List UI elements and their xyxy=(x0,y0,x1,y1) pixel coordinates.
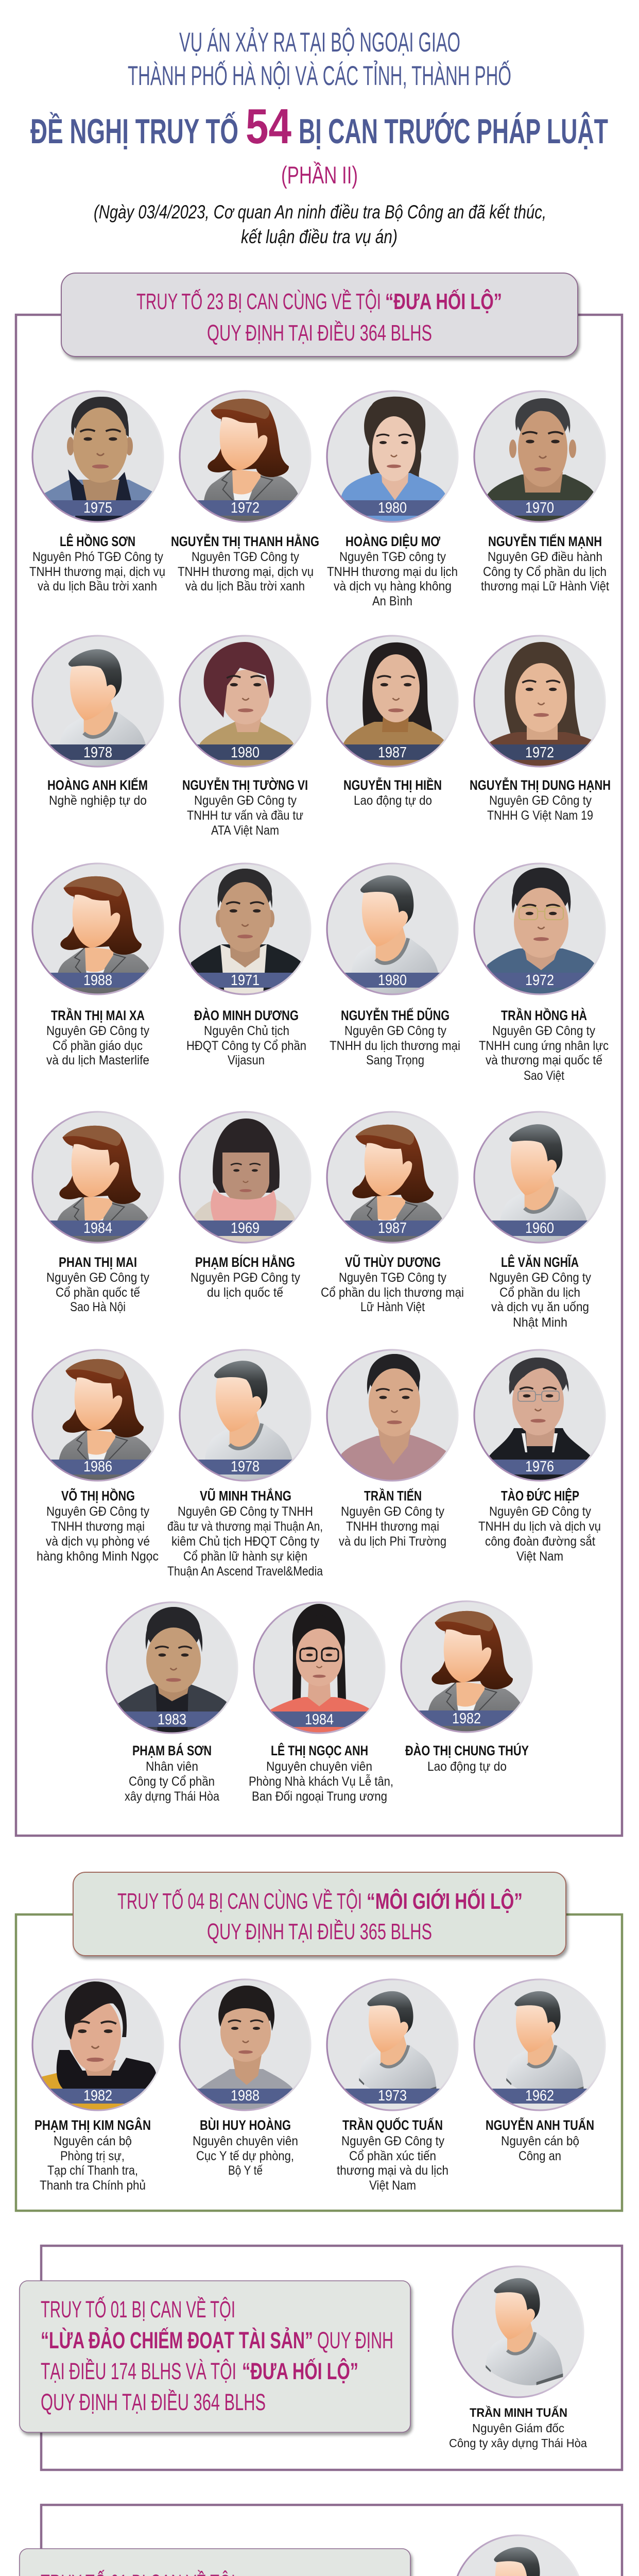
charge box xyxy=(20,2549,410,2576)
name and role: Nguyên cán bộ xyxy=(54,2134,132,2148)
portrait: 1988 xyxy=(231,2088,260,2104)
portrait: 1969 xyxy=(231,1220,260,1236)
name and role: Cổ phần du lịch thương mại xyxy=(321,1285,464,1300)
name and role xyxy=(321,1255,464,1314)
portrait: 1960 xyxy=(525,1220,554,1236)
name and role: Vijasun xyxy=(228,1053,265,1067)
name and role: An Bình xyxy=(372,594,412,608)
name and role: và dịch vụ phòng vé xyxy=(46,1534,150,1549)
portrait xyxy=(327,1350,458,1481)
portrait: 1972 xyxy=(525,972,554,989)
name and role: Nguyên GĐ Công ty xyxy=(344,1024,446,1038)
portrait: 1987 xyxy=(378,744,407,761)
name and role: TRẦN HỒNG HÀ xyxy=(501,1008,587,1023)
name and role xyxy=(191,1255,300,1300)
name and role: Cổ phần xúc tiến xyxy=(349,2149,436,2163)
name and role: Thuận An Ascend Travel&Media xyxy=(167,1564,323,1579)
name and role xyxy=(479,1008,609,1083)
name and role: Cổ phần giáo dục xyxy=(53,1039,143,1053)
name and role: và du lịch Bầu trời xanh xyxy=(38,579,157,594)
name and role: Nguyên GĐ Công ty xyxy=(492,1024,595,1038)
name and role: VÕ THỊ HỒNG xyxy=(61,1488,135,1503)
name and role xyxy=(470,777,611,823)
name and role: Nguyên TGĐ Công ty xyxy=(339,1270,446,1285)
name and role: TRẦN THỊ MAI XA xyxy=(51,1008,145,1023)
name and role: Cổ phần lữ hành sự kiện xyxy=(183,1549,307,1564)
person: Hoàng Diệu Mơ xyxy=(326,391,458,608)
heading: đưa hối lộ: TRUY TỐ 23 BỊ CAN CÙNG VỀ TỘI xyxy=(136,288,381,314)
heading: môi giới hối lộ: QUY ĐỊNH TẠI ĐIỀU 365 BLHS xyxy=(207,1919,432,1944)
portrait xyxy=(179,636,311,767)
name and role: Cục Y tế dự phòng, xyxy=(196,2149,294,2163)
name and role: TRẦN QUỐC TUẤN xyxy=(342,2117,443,2133)
portrait xyxy=(32,391,164,522)
name and role: Nguyên GĐ Công ty xyxy=(489,793,592,808)
charge box xyxy=(20,2281,410,2432)
portrait xyxy=(106,1602,238,1734)
portrait xyxy=(179,1112,311,1243)
portrait xyxy=(32,1979,164,2111)
name and role: kiêm Chủ tịch HĐQT Công ty xyxy=(171,1534,319,1549)
name and role xyxy=(46,1008,149,1067)
portrait xyxy=(326,1979,458,2110)
name and role: Nguyên GĐ Công ty xyxy=(489,1504,591,1519)
person: Đào Thị Chung Thúy xyxy=(401,1601,532,1774)
name and role: Công ty Cổ phần du lịch xyxy=(483,565,607,579)
name and role: Thanh tra Chính phủ xyxy=(40,2178,146,2193)
name and role: Lao động tự do xyxy=(427,1759,507,1774)
name and role xyxy=(182,777,308,838)
name and role: ĐÀO THỊ CHUNG THÚY xyxy=(405,1743,529,1758)
name and role: Phòng Nhà khách Vụ Lễ tân, xyxy=(249,1774,393,1789)
portrait: 1971 xyxy=(231,972,260,989)
name and role: Nguyên TGĐ công ty xyxy=(339,550,446,564)
person: Nguyễn Anh Tuấn xyxy=(474,1979,606,2163)
name and role: Nguyên GĐ Công ty xyxy=(489,1270,591,1285)
name and role: Nguyên Chủ tịch xyxy=(204,1024,289,1038)
name and role: Việt Nam xyxy=(369,2178,416,2193)
portrait: 1978 xyxy=(231,1459,260,1475)
date note: kết luận điều tra vụ án) xyxy=(241,226,398,247)
person: Phạm Bá Sơn xyxy=(106,1602,238,1804)
name and role: TNHH thương mại, dịch vụ xyxy=(178,565,314,579)
name and role xyxy=(449,2405,587,2450)
person: Nguyễn Thế Dũng xyxy=(326,863,460,1067)
name and role xyxy=(29,534,165,594)
name and role: đầu tư và thương mại Thuận An, xyxy=(167,1519,323,1534)
name and role: Nguyên cán bộ xyxy=(501,2134,579,2148)
name and role xyxy=(171,534,319,594)
main headline xyxy=(30,99,608,154)
name and role: Nguyên chuyên viên xyxy=(193,2134,298,2148)
name and role: Nguyên GĐ Công ty xyxy=(46,1504,149,1519)
name and role: TRẦN MINH TUẤN xyxy=(470,2405,567,2420)
portrait: 1973 xyxy=(378,2088,407,2104)
person: Trần Tiến xyxy=(327,1350,458,1549)
portrait xyxy=(474,1979,606,2110)
name and role: Nghề nghiệp tự do xyxy=(49,793,147,808)
name and role: LÊ THỊ NGỌC ANH xyxy=(271,1743,368,1758)
panel: đưa hối lộ xyxy=(16,273,622,1836)
name and role: Cổ phần quốc tế xyxy=(56,1285,140,1300)
person: Lê Thị Ngọc Anh xyxy=(249,1602,393,1804)
name and role: PHẠM THỊ KIM NGÂN xyxy=(34,2117,151,2133)
name and role: Nguyên GĐ điều hành xyxy=(488,550,602,564)
person: Vũ Minh Thắng xyxy=(167,1350,323,1579)
portrait: 1980 xyxy=(378,972,407,989)
name and role: Phòng trị sự, xyxy=(60,2149,125,2163)
person: Trần Hồng Hà xyxy=(474,863,609,1083)
name and role xyxy=(330,1008,460,1067)
charge box: TẠI ĐIỀU 174 BLHS VÀ TỘI xyxy=(41,2358,236,2384)
portrait xyxy=(474,863,606,995)
name and role xyxy=(481,534,609,594)
name and role: thương mại Lữ Hành Việt xyxy=(481,579,609,594)
main headline: ĐỀ NGHỊ TRUY TỐ xyxy=(30,111,238,151)
name and role: và dịch vụ hàng không xyxy=(334,579,452,594)
portrait xyxy=(401,1601,532,1739)
name and role: Nguyên Giám đốc xyxy=(472,2421,564,2435)
name and role: Nguyên PGĐ Công ty xyxy=(191,1270,300,1285)
person: Trần Quốc Tuấn xyxy=(326,1979,458,2193)
name and role: BÙI HUY HOÀNG xyxy=(200,2117,291,2133)
heading: đưa hối lộ: QUY ĐỊNH TẠI ĐIỀU 364 BLHS xyxy=(207,320,432,346)
person: Bùi Huy Hoàng xyxy=(179,1979,311,2178)
portrait xyxy=(32,636,164,774)
portrait: 1972 xyxy=(525,744,554,761)
name and role: Cổ phần du lịch xyxy=(499,1285,580,1300)
name and role xyxy=(339,1488,446,1549)
name and role: TNHH thương mại xyxy=(51,1519,145,1534)
name and role: Bộ Y tế xyxy=(228,2163,263,2178)
portrait xyxy=(179,1350,311,1485)
name and role: NGUYỄN THỊ HIỀN xyxy=(343,777,442,793)
person: Phan Thị Mai xyxy=(32,1112,164,1314)
name and role: Nguyên chuyên viên xyxy=(266,1759,372,1774)
name and role: Ban Đối ngoại Trung ương xyxy=(252,1789,387,1804)
person: Lê Hồng Sơn xyxy=(29,391,165,594)
portrait xyxy=(32,1350,164,1487)
person: Tào Đức Hiệp xyxy=(474,1350,606,1564)
name and role xyxy=(486,2117,594,2163)
heading: đưa hối lộ xyxy=(61,273,578,357)
name and role: NGUYỄN THỊ DUNG HẠNH xyxy=(470,777,611,793)
name and role xyxy=(47,777,148,808)
name and role: HOÀNG DIỆU MƠ xyxy=(346,534,440,549)
date note xyxy=(94,201,546,247)
name and role: Sao Hà Nội xyxy=(70,1300,126,1314)
panel: môi giới hối lộ xyxy=(16,1872,622,2211)
portrait: 1987 xyxy=(378,1220,407,1236)
name and role: và du lịch Phi Trường xyxy=(339,1534,446,1549)
portrait xyxy=(474,636,606,767)
name and role: Nguyên Phó TGĐ Công ty xyxy=(32,550,163,564)
name and role xyxy=(489,1255,591,1330)
name and role: Nhân viên xyxy=(146,1759,198,1774)
person: Trần Thị Mai Xa xyxy=(32,863,164,1067)
name and role: Lao động tự do xyxy=(354,793,432,808)
person: Nguyễn Thị Tường Vi xyxy=(179,636,311,838)
name and role xyxy=(46,1255,149,1314)
name and role xyxy=(167,1488,323,1579)
charge box: “LỪA ĐẢO CHIẾM ĐOẠT TÀI SẢN” xyxy=(41,2327,313,2353)
name and role xyxy=(37,1488,159,1564)
name and role: và du lịch Bầu trời xanh xyxy=(185,579,305,594)
name and role xyxy=(186,1008,306,1067)
name and role: NGUYỄN THẾ DŨNG xyxy=(341,1008,450,1023)
name and role: TÀO ĐỨC HIỆP xyxy=(501,1488,579,1503)
name and role: Tạp chí Thanh tra, xyxy=(47,2163,138,2178)
name and role: Sang Trọng xyxy=(366,1053,424,1067)
portrait: 1962 xyxy=(525,2088,554,2104)
name and role xyxy=(34,2117,151,2193)
name and role: Việt Nam xyxy=(516,1549,563,1564)
portrait: 1975 xyxy=(83,500,112,516)
name and role: thương mại và du lịch xyxy=(337,2163,448,2178)
name and role xyxy=(337,2117,448,2193)
charge box: QUY ĐỊNH xyxy=(317,2327,393,2353)
name and role: VŨ THÙY DƯƠNG xyxy=(345,1255,441,1270)
name and role: du lịch quốc tế xyxy=(207,1285,283,1300)
charge box: “ĐƯA HỐI LỘ” xyxy=(242,2358,358,2384)
name and role: Nguyên TGĐ Công ty xyxy=(192,550,299,564)
name and role: Nguyên GĐ Công ty xyxy=(341,1504,444,1519)
panel: Trần Minh Tuấn xyxy=(20,2246,622,2470)
name and role: TNHH du lịch và dịch vụ xyxy=(478,1519,601,1534)
name and role: LÊ VĂN NGHĨA xyxy=(501,1255,579,1270)
portrait: 1986 xyxy=(83,1459,112,1475)
person: Nguyễn Thị Thanh Hằng xyxy=(171,391,319,594)
charge box: TRUY TỐ 01 BỊ CAN VỀ TỘI xyxy=(41,2296,235,2323)
person: Phạm Bích Hằng xyxy=(179,1112,311,1300)
portrait: 1980 xyxy=(231,744,260,761)
name and role xyxy=(249,1743,393,1804)
name and role: NGUYỄN THỊ THANH HẰNG xyxy=(171,534,319,549)
name and role: Công an xyxy=(519,2149,561,2163)
name and role: công đoàn đường sắt xyxy=(485,1534,595,1549)
person: Đào Minh Dương xyxy=(179,863,311,1067)
name and role: TNHH thương mại xyxy=(346,1519,439,1534)
person: Hoàng Anh Kiếm xyxy=(32,636,164,808)
person: Võ Thị Hồng xyxy=(32,1350,164,1564)
heading: môi giới hối lộ: TRUY TỐ 04 BỊ CAN CÙNG VỀ TỘI xyxy=(117,1888,362,1914)
name and role xyxy=(327,534,458,608)
name and role: Nguyên GĐ Công ty xyxy=(194,793,297,808)
portrait xyxy=(179,391,311,527)
name and role: NGUYỄN THỊ TƯỜNG VI xyxy=(182,777,308,793)
subtitle part: (PHẦN II) xyxy=(281,161,358,189)
portrait xyxy=(32,863,164,1005)
portrait: 1970 xyxy=(525,500,554,516)
name and role: TNHH cung ứng nhân lực xyxy=(479,1039,609,1053)
name and role: xây dựng Thái Hòa xyxy=(125,1789,219,1804)
portrait: 1984 xyxy=(83,1220,112,1236)
name and role xyxy=(405,1743,529,1774)
name and role: TRẦN TIẾN xyxy=(364,1488,422,1503)
name and role: ATA Việt Nam xyxy=(211,823,279,838)
name and role: TNHH thương mại du lịch xyxy=(327,565,458,579)
name and role: TNHH G Việt Nam 19 xyxy=(487,808,593,823)
portrait: 1988 xyxy=(83,972,112,989)
name and role: Nguyên GĐ Công ty xyxy=(46,1024,149,1038)
title block xyxy=(30,27,608,247)
portrait xyxy=(179,1979,311,2111)
person: Lê Văn Nghĩa xyxy=(474,1112,606,1330)
name and role: Nguyên GĐ Công ty TNHH xyxy=(178,1504,313,1519)
name and role: PHẠM BÍCH HẰNG xyxy=(195,1255,295,1270)
heading: môi giới hối lộ xyxy=(73,1872,566,1956)
person: Nguyễn Thị Dung Hạnh xyxy=(470,636,611,823)
heading: đưa hối lộ: “ĐƯA HỐI LỘ” xyxy=(385,288,502,314)
person: Nguyễn Thị Hiền xyxy=(326,636,458,808)
portrait: 1972 xyxy=(231,500,260,516)
portrait xyxy=(326,391,458,522)
name and role: LÊ HỒNG SƠN xyxy=(60,534,135,549)
name and role: Sao Việt xyxy=(524,1069,564,1083)
title line 1: VỤ ÁN XẢY RA TẠI BỘ NGOẠI GIAO xyxy=(179,27,460,58)
name and role: HOÀNG ANH KIẾM xyxy=(47,777,148,793)
portrait xyxy=(474,391,606,522)
person: Vũ Thùy Dương xyxy=(321,1112,464,1314)
portrait xyxy=(32,1112,164,1254)
name and role xyxy=(478,1488,601,1564)
portrait: 1976 xyxy=(525,1459,554,1475)
name and role xyxy=(125,1743,219,1804)
name and role: Nhật Minh xyxy=(513,1315,567,1330)
portrait xyxy=(326,636,458,767)
portrait: 1982 xyxy=(452,1710,481,1727)
main headline: 54 xyxy=(246,99,291,154)
name and role: HĐQT Công ty Cổ phần xyxy=(186,1039,306,1053)
portrait xyxy=(474,1350,606,1481)
name and role: Nguyên GĐ Công ty xyxy=(46,1270,149,1285)
person: Nguyễn Tiến Mạnh xyxy=(474,391,609,594)
portrait: 1982 xyxy=(83,2088,112,2104)
panel: Hoàng Văn Hưng xyxy=(20,2505,622,2576)
name and role: ĐÀO MINH DƯƠNG xyxy=(194,1008,299,1023)
name and role: PHẠM BÁ SƠN xyxy=(132,1743,212,1758)
name and role: Công ty Cổ phần xyxy=(129,1774,215,1789)
portrait xyxy=(474,1112,606,1249)
portrait xyxy=(453,2535,583,2576)
name and role: và dịch vụ ăn uống xyxy=(491,1300,589,1314)
person: Phạm Thị Kim Ngân xyxy=(32,1979,164,2193)
name and role xyxy=(193,2117,298,2178)
portrait: 1980 xyxy=(378,500,407,516)
portrait xyxy=(253,1602,385,1734)
name and role: NGUYỄN ANH TUẤN xyxy=(486,2117,594,2133)
heading: môi giới hối lộ: “MÔI GIỚI HỐI LỘ” xyxy=(367,1888,523,1914)
name and role: Công ty xây dựng Thái Hòa xyxy=(449,2436,587,2450)
portrait: 1984 xyxy=(305,1711,334,1728)
name and role: Lữ Hành Việt xyxy=(360,1300,425,1314)
name and role: PHAN THỊ MAI xyxy=(59,1255,137,1270)
name and role: NGUYỄN TIẾN MẠNH xyxy=(488,534,602,549)
name and role: và du lịch Masterlife xyxy=(46,1053,149,1067)
charge box: QUY ĐỊNH TẠI ĐIỀU 364 BLHS xyxy=(41,2389,266,2415)
portrait: 1983 xyxy=(158,1711,186,1728)
portrait: 1978 xyxy=(83,744,112,761)
name and role: Nguyên GĐ Công ty xyxy=(341,2134,444,2148)
name and role: TNHH du lịch thương mại xyxy=(330,1039,460,1053)
name and role: và thương mại quốc tế xyxy=(486,1053,602,1067)
name and role xyxy=(343,777,442,808)
portrait xyxy=(326,1112,458,1253)
name and role: TNHH tư vấn và đầu tư xyxy=(187,808,303,823)
name and role: hàng không Minh Ngọc xyxy=(37,1549,159,1564)
name and role: TNHH thương mại, dịch vụ xyxy=(29,565,165,579)
portrait xyxy=(453,2266,583,2397)
portrait xyxy=(179,863,311,995)
portrait xyxy=(326,863,458,1000)
name and role: VŨ MINH THẮNG xyxy=(200,1488,291,1503)
